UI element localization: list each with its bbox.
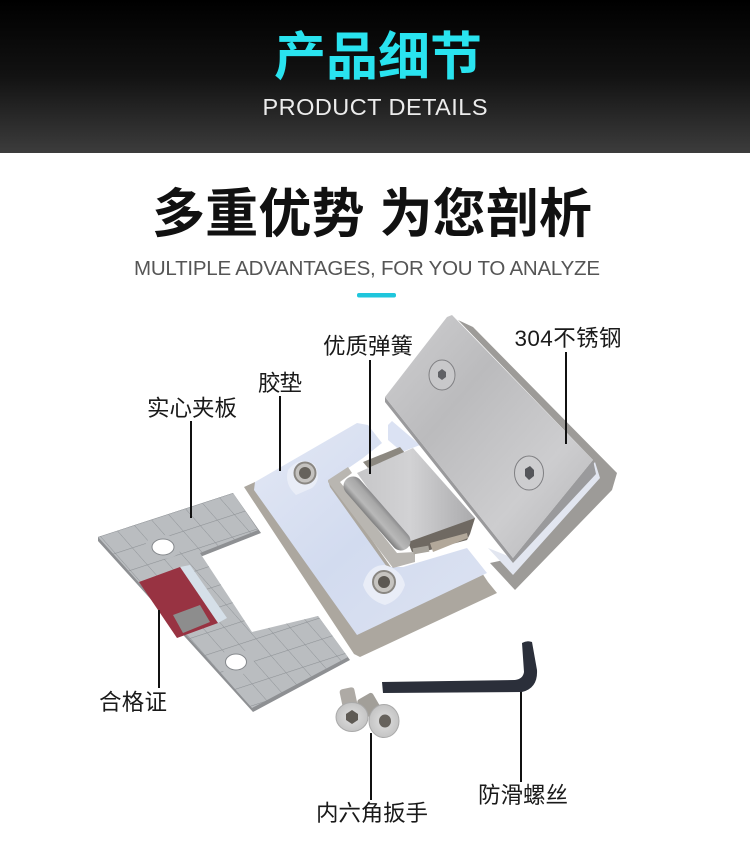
screw: upper — [429, 360, 455, 390]
callout: anti-slip screws: 防滑螺丝 — [478, 783, 568, 808]
callout: gasket — [258, 371, 302, 471]
blue silicone gasket — [254, 423, 487, 635]
metal tab — [363, 447, 405, 468]
callout: anti-slip screws — [478, 692, 568, 808]
hex key — [382, 641, 537, 693]
certificate sticker — [139, 565, 227, 638]
callout: stainless steel — [514, 326, 622, 444]
callout: hex key label — [316, 733, 428, 826]
callout: spring — [323, 334, 413, 474]
screw: lower — [514, 456, 544, 490]
pin — [413, 546, 429, 554]
spring housing — [357, 448, 475, 544]
callout: solid clamp plate — [147, 396, 237, 518]
housing underside — [408, 518, 475, 552]
title: product details: 产品细节 — [274, 29, 482, 87]
callout: gasket: 胶垫 — [258, 371, 302, 396]
hole — [145, 535, 181, 559]
hole — [218, 649, 254, 675]
heading: advantages: 多重优势 为您剖析 — [152, 185, 592, 244]
callout: certificate: 合格证 — [99, 690, 167, 715]
clamp base metal — [244, 480, 497, 657]
gasket hole lug bottom — [363, 565, 405, 605]
gasket hole lug top — [287, 461, 318, 495]
subheading: english: MULTIPLE ADVANTAGES, FOR YOU TO ANALYZE — [134, 257, 600, 280]
callout: certificate — [99, 610, 167, 715]
screws — [336, 687, 399, 738]
callout: stainless steel: 304不锈钢 — [514, 326, 622, 351]
hinge: rear plate and gasket — [388, 320, 617, 590]
callout: spring: 优质弹簧 — [323, 334, 413, 359]
solid clamp plate — [98, 493, 350, 712]
hinge: front stainless plate — [385, 315, 596, 563]
callout: solid clamp plate: 实心夹板 — [147, 396, 237, 421]
spring roller — [353, 486, 401, 541]
callout: hex key label: 内六角扳手 — [316, 801, 428, 826]
accent bar — [357, 293, 396, 298]
product: glass door hinge — [98, 315, 617, 738]
subtitle: english header: PRODUCT DETAILS — [262, 94, 488, 120]
spring frame — [328, 467, 415, 568]
header band — [0, 0, 750, 153]
